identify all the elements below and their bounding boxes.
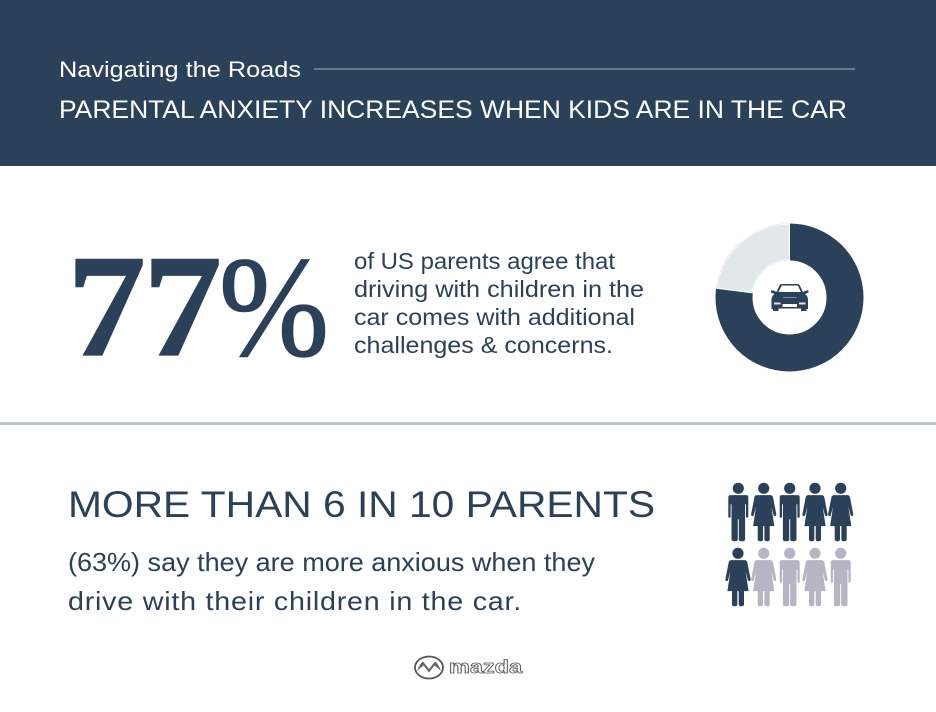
divider [0,422,936,425]
remaining 23% segment [717,224,790,293]
header rule [314,68,855,70]
stat description [354,248,644,358]
stat description: driving with children in the [354,276,644,302]
body text 63%: drive with their children in the car. [68,586,522,616]
body text 63%: (63%) say they are more anxious when they [68,547,595,577]
stat description: car comes with additional [354,304,635,330]
body text 63% [68,547,595,616]
heading: more than 6 in 10 parents: MORE THAN 6 IN 10 PARENTS [68,484,655,525]
header band [0,0,936,166]
donut chart 77% [717,224,845,353]
logo: mazda [415,656,523,678]
logo: mazda: mazda [449,657,523,677]
stat description: challenges & concerns. [354,332,613,358]
stat description: of US parents agree that [354,248,615,274]
big stat 77% [67,225,329,387]
pictogram: 6 of 10 parents [725,483,853,606]
header title: PARENTAL ANXIETY INCREASES WHEN KIDS ARE IN THE CAR [59,96,847,124]
header kicker: Navigating the Roads [59,57,301,82]
icon: car [771,284,808,311]
big stat 77%: 7 [67,225,146,387]
big stat 77%: % [219,228,329,386]
big stat 77%: 7 [143,225,222,387]
